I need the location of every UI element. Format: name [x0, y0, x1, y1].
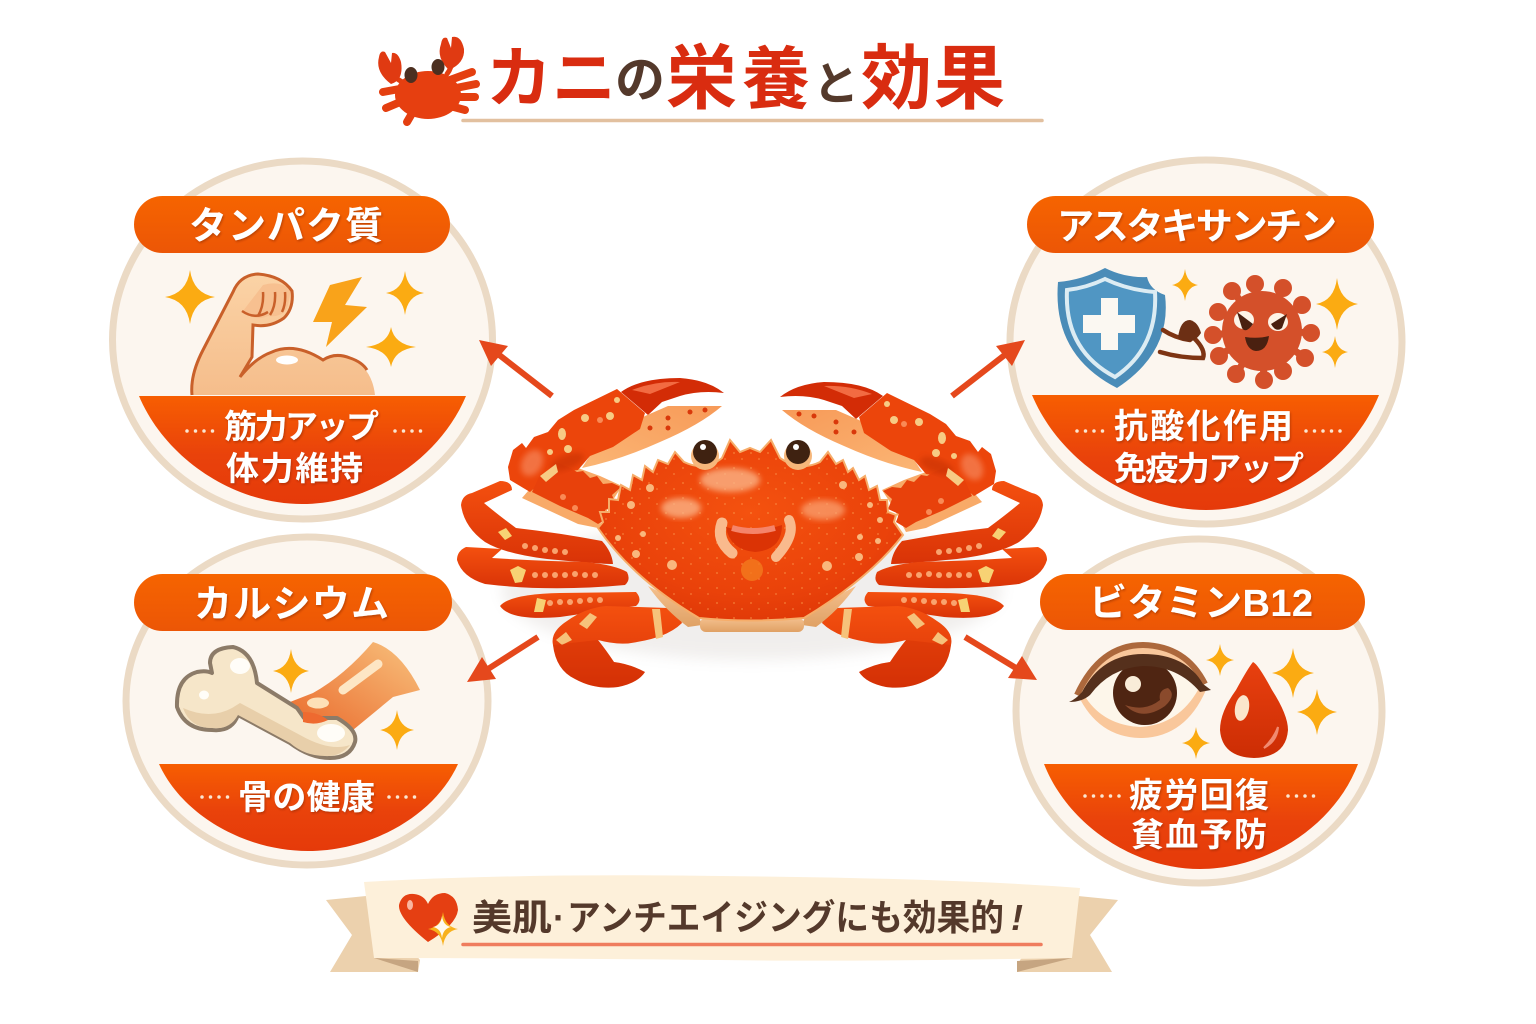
central crab illustration: [457, 378, 1047, 688]
protein benefits: [224, 408, 379, 487]
panel: vitamin B12: [1016, 539, 1382, 883]
vitamin result band: [1044, 764, 1358, 869]
crab left claw: [508, 378, 724, 528]
protein result band: [139, 396, 466, 504]
icon: fingertip on bone: [303, 712, 328, 724]
title: [486, 40, 1005, 119]
crab left legs: [457, 481, 682, 688]
icon: shield arm punching: [1160, 320, 1204, 358]
crab underside plates: [648, 586, 856, 632]
calcium heading pill: [134, 574, 452, 631]
crab right legs: [822, 481, 1047, 688]
dotted accents: [1085, 794, 1317, 798]
crab carapace: [598, 440, 903, 620]
astaxanthin benefits: 免疫力アップ: [1114, 450, 1304, 487]
title: カ: [486, 41, 552, 115]
icon: sparkles: [1172, 269, 1358, 368]
vitamin benefits: 疲労回復: [1129, 777, 1269, 815]
arrow: to protein: [479, 340, 552, 396]
ribbon left tail: [326, 896, 420, 972]
protein benefits: 体力維持: [226, 450, 363, 487]
crab shadow: [502, 520, 1002, 660]
banner underline: [463, 943, 1041, 946]
title: 養: [742, 42, 810, 118]
dotted accents: [1077, 429, 1345, 433]
title: 果: [934, 40, 1005, 119]
icon: flexed arm: [192, 274, 375, 395]
icon: eye: [1069, 644, 1211, 738]
panel: protein: [112, 161, 492, 519]
vitamin heading: ビタミンB12: [1089, 583, 1313, 625]
calcium circle: [126, 537, 488, 865]
title: 栄: [666, 40, 737, 119]
astaxanthin heading pill: [1027, 196, 1374, 253]
icon: shield: [1057, 268, 1166, 388]
protein heading: タンパク質: [189, 206, 383, 248]
calcium heading: カルシウム: [194, 584, 389, 626]
icon: lightning bolt: [313, 277, 367, 347]
calcium benefit: 骨の健康: [238, 779, 375, 817]
title: の: [615, 52, 665, 108]
bottom ribbon banner: [326, 875, 1118, 972]
banner text: 美肌: [472, 897, 552, 938]
icon: sparkles: [1182, 644, 1337, 759]
astaxanthin benefits: [1114, 408, 1304, 487]
crab right claw: [780, 382, 996, 532]
panel: calcium: [126, 537, 488, 865]
icon: heart with sparkle: [399, 893, 458, 946]
title: と: [813, 58, 859, 110]
icon: bone: [177, 647, 355, 758]
protein heading pill: [134, 196, 450, 253]
dotted accents: [202, 795, 419, 799]
astaxanthin benefits: 抗酸化作用: [1114, 408, 1293, 446]
vitamin benefits: 貧血予防: [1131, 816, 1267, 853]
icon: virus: [1204, 275, 1320, 389]
dotted accents: [187, 429, 424, 433]
banner text: ·: [553, 897, 565, 938]
protein benefits: 筋力アップ: [224, 408, 379, 445]
title: 効: [861, 40, 932, 119]
astaxanthin result band: [1032, 395, 1379, 510]
panel: astaxanthin: [1010, 160, 1402, 524]
astaxanthin circle: [1010, 160, 1402, 524]
arrow: to vitamin B12: [965, 637, 1037, 680]
astaxanthin heading: アスタキサンチン: [1057, 206, 1337, 247]
ribbon right tail: [1017, 896, 1118, 972]
crab eyes: [691, 440, 812, 470]
arrow: to calcium: [467, 637, 538, 682]
title: ニ: [552, 43, 616, 115]
title underline: [463, 119, 1042, 122]
vitamin heading pill: [1040, 574, 1365, 630]
title crab icon: [378, 37, 476, 122]
protein circle: [112, 161, 492, 519]
vitamin circle: [1016, 539, 1382, 883]
vitamin benefits: [1129, 777, 1269, 853]
icon: sparkles: [273, 649, 414, 750]
icon: sparkles: [165, 270, 424, 367]
ribbon face: [364, 875, 1080, 961]
banner text: アンチエイジングにも効果的: [567, 897, 1004, 938]
calcium result band: [159, 764, 458, 851]
icon: hand: [290, 642, 420, 730]
banner text: !: [1011, 897, 1023, 938]
arrow: to astaxanthin: [952, 340, 1025, 396]
icon: blood drop: [1220, 662, 1288, 758]
